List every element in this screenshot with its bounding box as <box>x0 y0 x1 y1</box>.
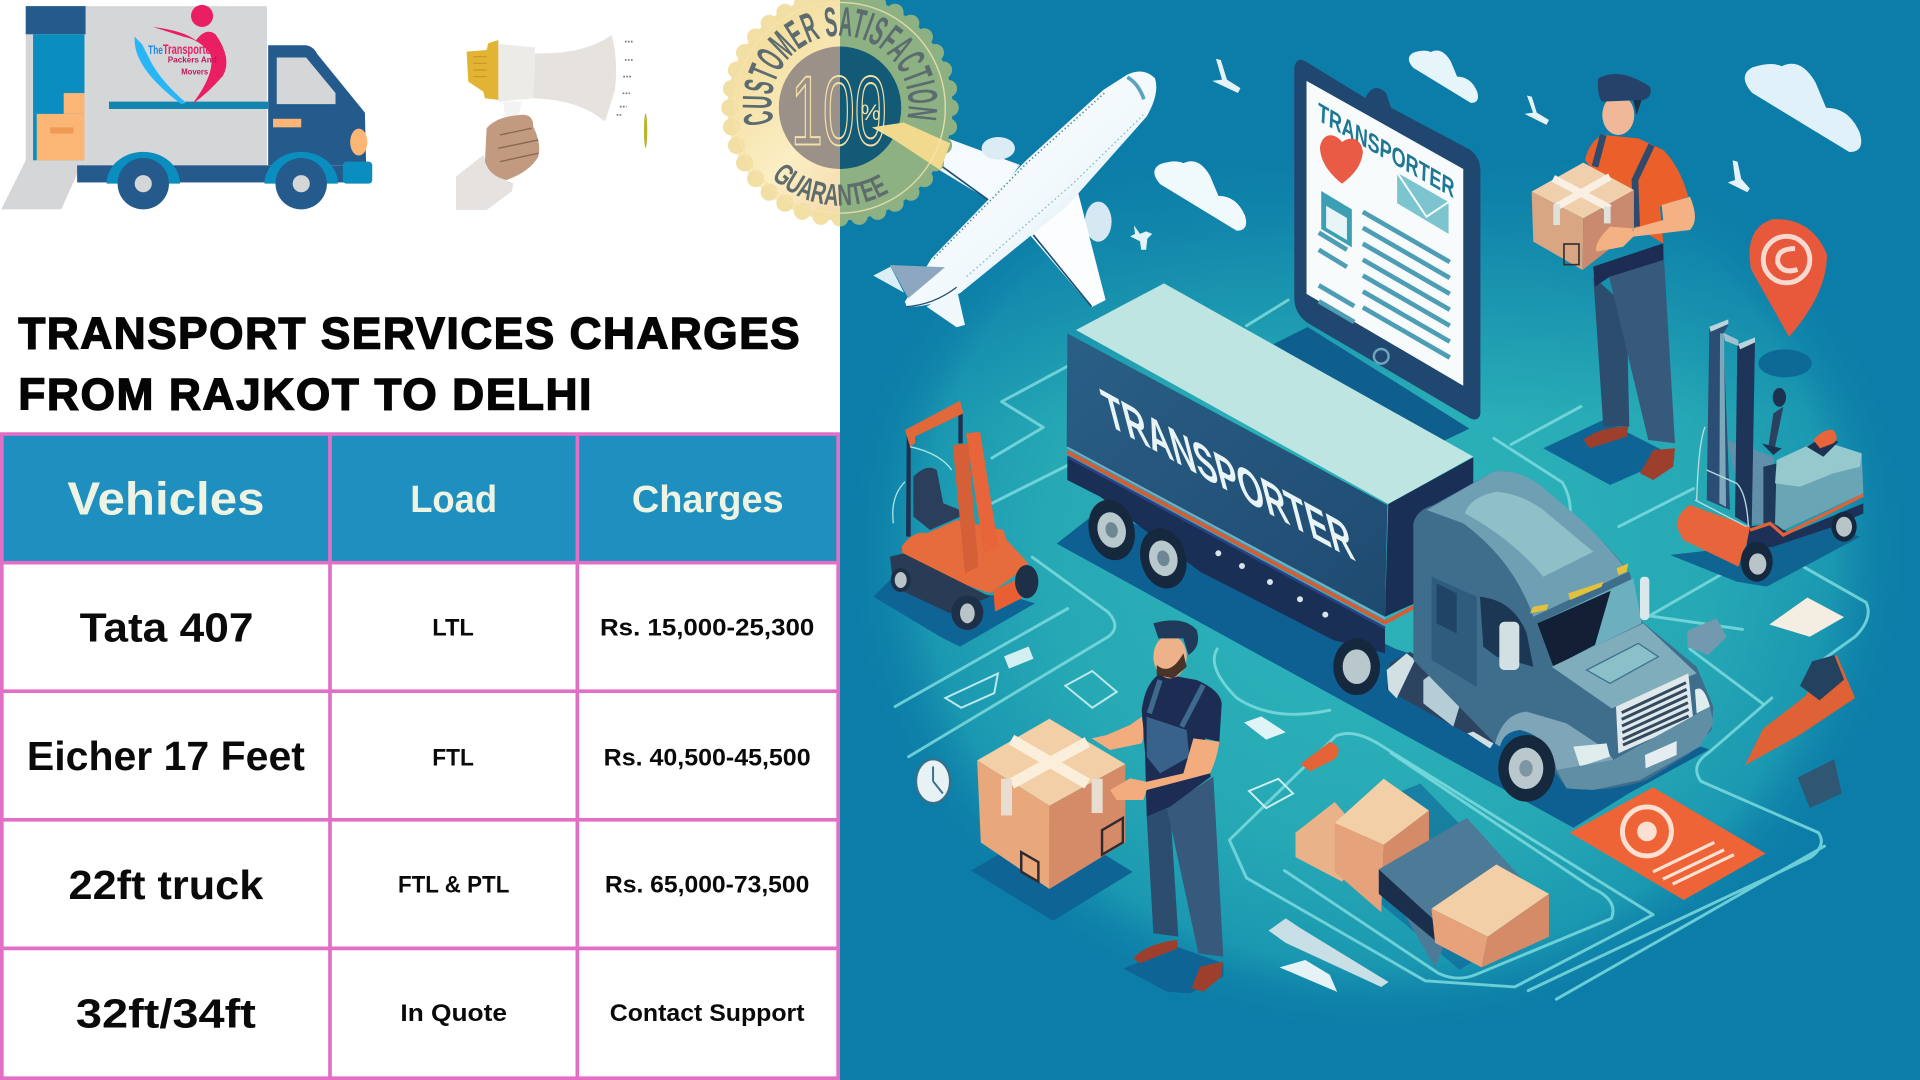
illustration: large parcel <box>971 719 1133 921</box>
row: Eicher 17 Feet: FTL <box>432 744 474 771</box>
illustration: airplane <box>873 71 1156 327</box>
badge ring text: CUSTOMER SATISFACTION <box>742 7 938 125</box>
title: TRANSPORT SERVICES CHARGES <box>18 309 800 358</box>
row: Tata 407 <box>80 605 814 651</box>
illustration: delivery man top right <box>1532 74 1695 485</box>
illustration: right forklift <box>1670 319 1863 587</box>
title <box>18 309 800 420</box>
company logo: Transporter <box>163 42 215 57</box>
illustration: parcel stack <box>1296 779 1549 970</box>
company logo <box>135 5 226 104</box>
trailer lettering: TRANSPORTER <box>1096 378 1360 573</box>
badge: customer satisfaction guarantee: % <box>861 100 880 125</box>
icon: birds <box>1130 59 1750 250</box>
illustration: truck trailer <box>1067 283 1473 653</box>
illustration floor <box>849 65 1907 1032</box>
row: Tata 407: Rs. 15,000-25,300 <box>600 615 814 642</box>
floor route lines <box>895 300 1868 999</box>
row: Eicher 17 Feet <box>27 733 811 779</box>
icon: heart <box>1320 135 1363 184</box>
panel: illustration background <box>840 0 1920 1080</box>
cloud: top right <box>1745 64 1861 152</box>
icon: truck logo illustration <box>1 5 372 209</box>
row: Eicher 17 Feet: Rs. 40,500-45,500 <box>604 744 811 771</box>
illustration: left forklift <box>873 401 1038 647</box>
illustration: orange notice board <box>1570 787 1766 900</box>
row: Tata 407: LTL <box>432 615 474 642</box>
row: 22ft truck: 22ft truck <box>69 862 264 908</box>
icon: calendar <box>1321 191 1352 247</box>
title: FROM RAJKOT TO DELHI <box>18 371 591 420</box>
row: Tata 407: Tata 407 <box>80 605 253 651</box>
company logo: The <box>148 43 163 57</box>
row: 22ft truck <box>69 862 809 908</box>
row: 32ft/34ft <box>76 990 804 1036</box>
icon: location pin <box>1750 219 1827 337</box>
panel: white left side <box>0 0 840 1080</box>
row: 32ft/34ft: 32ft/34ft <box>76 990 256 1036</box>
table header row: Vehicles <box>67 472 264 524</box>
table grid <box>2 434 838 1078</box>
table header row: Charges <box>632 479 784 521</box>
cloud: top small <box>1409 51 1478 103</box>
tablet heading: TRANSPORTER <box>1317 98 1455 205</box>
company logo: Movers <box>181 67 208 77</box>
icon: envelope <box>1397 173 1449 234</box>
company logo: Packers And <box>168 54 217 64</box>
illustration: truck shadow <box>1057 508 1709 828</box>
table header row: Load <box>410 479 497 521</box>
row: 22ft truck: Rs. 65,000-73,500 <box>605 872 809 899</box>
row: 32ft/34ft: In Quote <box>400 1000 507 1027</box>
document lines <box>1319 212 1450 358</box>
badge 100 percent: 100 <box>791 55 887 165</box>
sky tint <box>840 0 1920 416</box>
truck wheels: trailer <box>1082 494 1193 594</box>
badge guarantee text: GUARANTEE <box>774 164 889 206</box>
icons: small floor items <box>945 598 1855 992</box>
illustration: tablet stand shadow <box>1273 327 1469 443</box>
illustration: tablet <box>1294 60 1480 419</box>
row: 32ft/34ft: Contact Support <box>610 1000 804 1027</box>
row: Eicher 17 Feet: Eicher 17 Feet <box>27 733 305 779</box>
illustration: truck cab <box>1333 471 1713 802</box>
table header row <box>2 435 838 562</box>
icon: megaphone in hand <box>456 35 647 210</box>
icon: clock <box>916 759 950 803</box>
row: 22ft truck: FTL & PTL <box>398 872 509 899</box>
illustration: man with parcel <box>1092 620 1223 993</box>
cloud: centre <box>1154 161 1246 231</box>
charges table <box>2 434 838 1078</box>
badge: customer satisfaction guarantee <box>721 0 959 226</box>
